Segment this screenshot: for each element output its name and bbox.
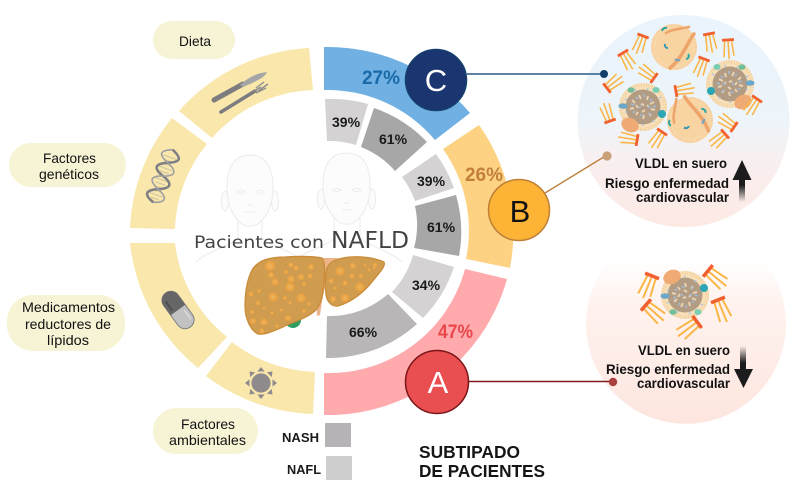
segment: B NAFL 39%: 39% <box>417 173 446 189</box>
heading: SUBTIPADO DE PACIENTES <box>419 442 545 481</box>
segment A 47%: 47% <box>438 322 473 343</box>
illustration: VLDL particles high <box>598 24 763 151</box>
segment: A NAFL 34% <box>392 255 454 318</box>
heading: SUBTIPADO DE PACIENTES: DE PACIENTES <box>419 461 545 481</box>
legend item: NASH: NASH <box>282 431 319 445</box>
icon: capsule <box>158 288 198 332</box>
segment: C NASH 61%: 61% <box>379 131 408 147</box>
text: VLDL and cardiovascular risk low: Riesgo enfermedad <box>606 361 730 377</box>
badge: C <box>406 50 466 110</box>
face: left patient <box>196 155 304 262</box>
segment: B NASH 61%: 61% <box>427 219 456 235</box>
legend <box>282 423 352 480</box>
title: Pacientes con NAFLD: Pacientes con <box>194 233 324 253</box>
badge: B: B <box>510 194 530 229</box>
pill: Factores genéticos: genéticos <box>39 166 99 182</box>
segment: C NAFL 39%: 39% <box>332 114 361 130</box>
segment: medicamentos <box>130 243 227 368</box>
pill: Dieta: Dieta <box>179 33 211 49</box>
icon: knife and fork <box>214 72 268 112</box>
pill: Medicamentos reductores de lípidos <box>7 295 125 351</box>
liver fat droplets <box>248 261 377 334</box>
icon: DNA helix <box>145 147 181 205</box>
panel: subtype A outcome circle <box>586 260 786 424</box>
text: VLDL and cardiovascular risk low: cardiovascular <box>637 375 731 391</box>
pill: Dieta <box>153 21 235 59</box>
chart: NASH and NAFL inner ring <box>325 99 461 358</box>
text: VLDL and cardiovascular risk high: Riesgo enfermedad <box>605 175 729 191</box>
text: VLDL and cardiovascular risk high: cardiovascular <box>636 189 730 205</box>
pill: Factores genéticos <box>9 143 126 187</box>
segment: factores genéticos <box>130 118 207 229</box>
segment: factores ambientales <box>206 342 315 414</box>
segment B 26% <box>443 125 513 268</box>
text: VLDL and cardiovascular risk low: VLDL en suero <box>638 342 730 358</box>
segment: A NAFL 34%: 34% <box>412 277 441 293</box>
connector: B <box>545 151 612 193</box>
segment: A NASH 66% <box>326 294 417 358</box>
illustration: fatty liver <box>245 256 384 334</box>
text: VLDL and cardiovascular risk low <box>606 342 731 391</box>
segment: B NASH 61% <box>414 195 461 256</box>
badge: B <box>488 180 550 240</box>
panel: subtype C and B outcome circle <box>578 15 790 227</box>
panel: risk factors ring <box>130 48 315 414</box>
text: VLDL and cardiovascular risk high <box>605 155 730 205</box>
pill: Medicamentos reductores de lípidos: lípidos <box>47 332 89 348</box>
segment: B NAFL 39% <box>402 154 454 201</box>
segment C 27% <box>324 47 470 140</box>
segment: A NASH 66%: 66% <box>349 324 378 340</box>
heading: SUBTIPADO DE PACIENTES: SUBTIPADO <box>419 442 520 462</box>
chart: patient subtype outer ring <box>324 47 513 415</box>
arrow: down <box>734 346 753 388</box>
badge: A <box>406 350 468 414</box>
segment B 26%: 26% <box>465 165 503 186</box>
title: Pacientes con NAFLD <box>194 228 409 254</box>
segment: dieta <box>179 48 313 138</box>
pill: Factores ambientales: ambientales <box>169 432 246 448</box>
illustration: VLDL particles low <box>636 264 734 342</box>
segment: C NAFL 39% <box>325 99 368 145</box>
pill: Factores ambientales <box>153 408 258 454</box>
connector: A <box>468 378 617 386</box>
pill: Medicamentos reductores de lípidos: Medicamentos <box>22 299 115 315</box>
segment A 47% <box>324 269 507 415</box>
text: VLDL and cardiovascular risk high: VLDL en suero <box>635 155 727 171</box>
badge: A: A <box>428 365 449 400</box>
icon: sun <box>245 367 277 399</box>
arrow: up <box>732 160 752 202</box>
title: Pacientes con NAFLD: NAFLD <box>331 228 409 254</box>
pill: Factores ambientales: Factores <box>181 416 235 432</box>
badge: C: C <box>425 63 447 98</box>
face: right patient <box>292 153 402 262</box>
segment: C NASH 61% <box>361 108 427 171</box>
connector: C <box>467 70 608 78</box>
pill: Medicamentos reductores de lípidos: reductores de <box>25 316 111 332</box>
illustration: patient faces <box>196 153 402 262</box>
legend item: NAFL: NAFL <box>287 463 321 477</box>
pill: Factores genéticos: Factores <box>43 150 96 166</box>
segment C 27%: 27% <box>362 68 400 89</box>
